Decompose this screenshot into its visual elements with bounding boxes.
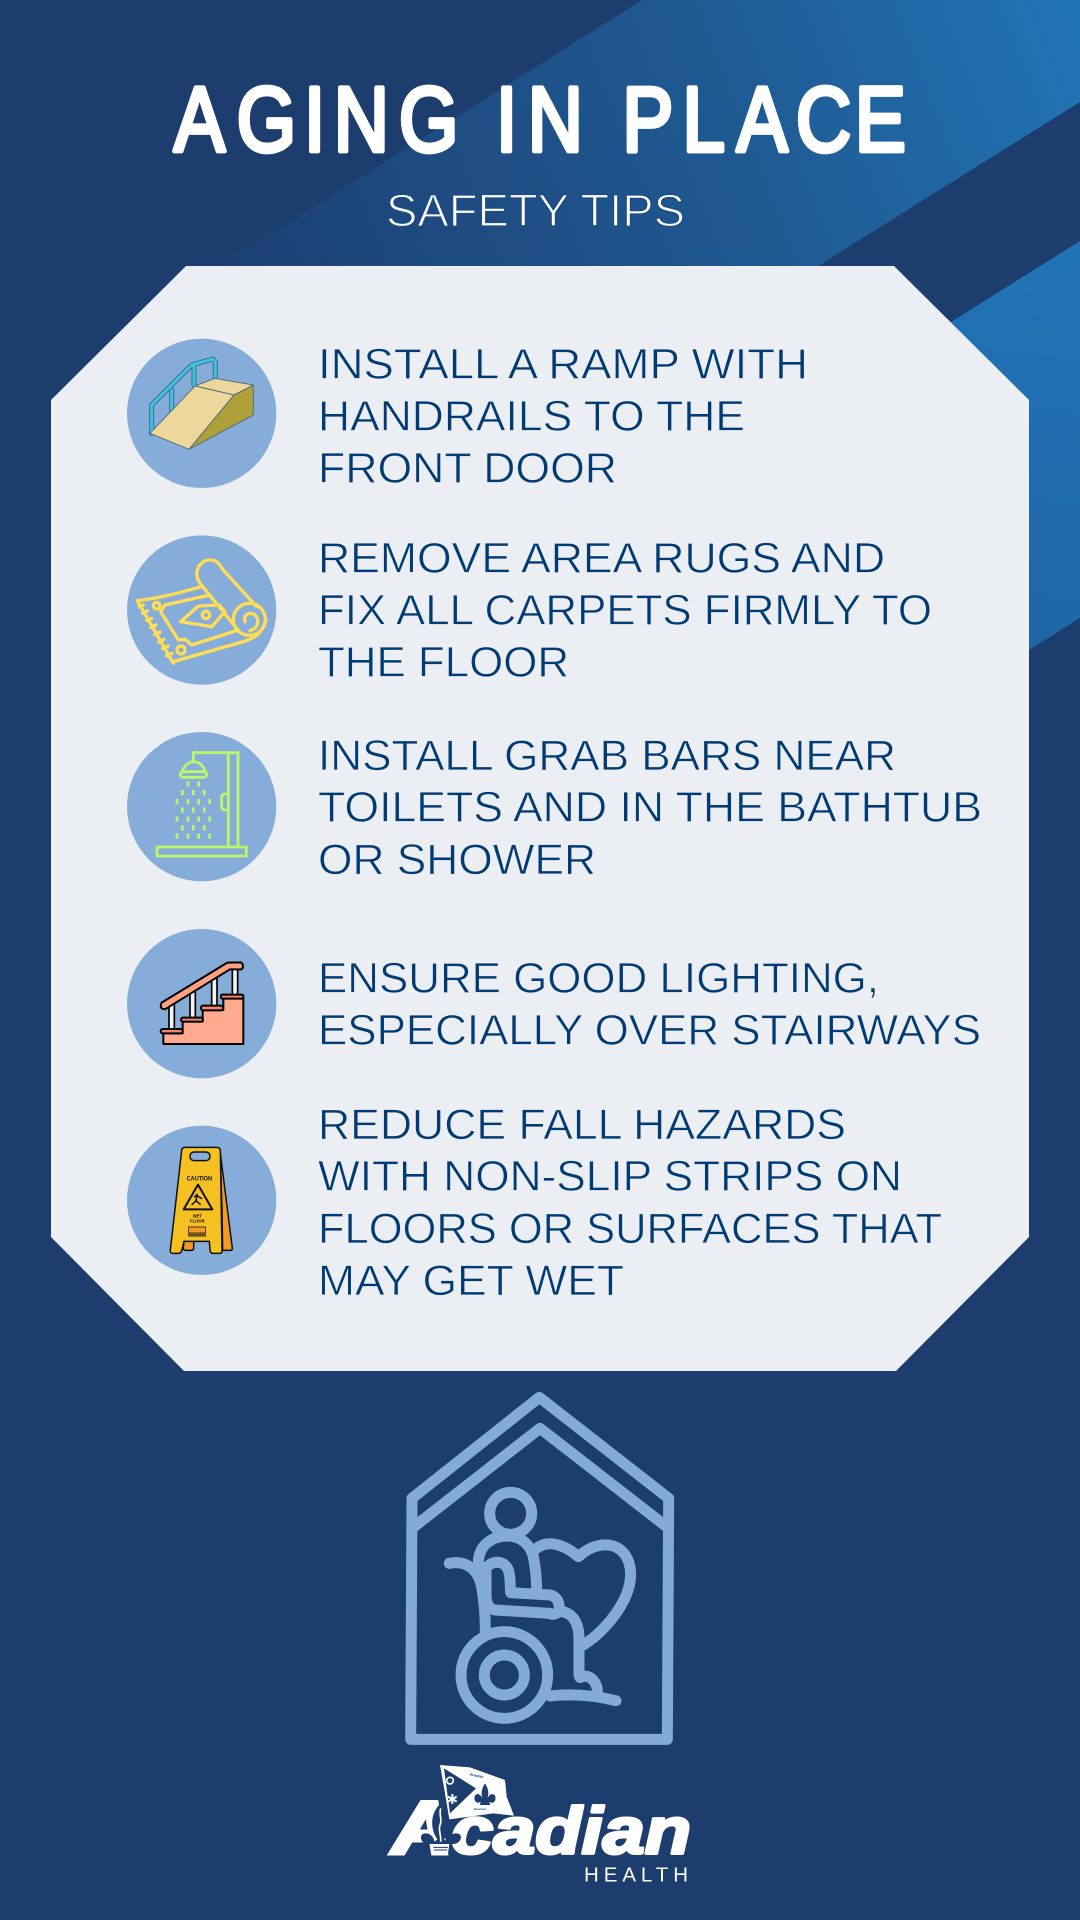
text: tip 1: HANDRAILS TO THE: [318, 394, 745, 441]
icon: ramp with handrails: [127, 339, 276, 488]
icon: wet floor sign: FLOOR: [190, 1219, 205, 1224]
panel: tips: [51, 266, 1029, 1371]
text: tip 2: THE FLOOR: [318, 640, 569, 687]
text: tip 5: WITH NON-SLIP STRIPS ON: [318, 1154, 902, 1201]
logo: Acadian Health: [391, 1765, 691, 1887]
text: tip 4: ESPECIALLY OVER STAIRWAYS: [318, 1008, 981, 1055]
text: tip 2: [318, 536, 932, 687]
title: AGING IN PLACE: [174, 67, 906, 171]
logo fleur-de-lis: [421, 1803, 461, 1853]
text: tip 5: MAY GET WET: [318, 1258, 624, 1305]
text: tip 5: REDUCE FALL HAZARDS: [318, 1102, 846, 1149]
logo flag: Services: [474, 1807, 487, 1811]
text: tip 3: OR SHOWER: [318, 837, 596, 884]
icon: stairs: [127, 929, 276, 1078]
icon: wet floor sign: [127, 1126, 276, 1275]
icon: shower: [127, 732, 276, 881]
text: tip 1: [318, 342, 808, 493]
text: tip 4: [318, 955, 981, 1055]
logo health label: HEALTH: [584, 1864, 688, 1887]
logo wordmark remainder: cadian: [451, 1793, 691, 1867]
logo wordmark initial: A: [391, 1788, 451, 1869]
text: tip 1: INSTALL A RAMP WITH: [318, 342, 808, 389]
icon: house with person in wheelchair and heart: [411, 1397, 669, 1739]
text: tip 2: REMOVE AREA RUGS AND: [318, 536, 885, 583]
logo flag: [440, 1765, 514, 1819]
subtitle: SAFETY TIPS: [386, 185, 685, 236]
text: tip 3: TOILETS AND IN THE BATHTUB: [318, 785, 982, 832]
text: tip 1: FRONT DOOR: [318, 446, 617, 493]
text: tip 3: INSTALL GRAB BARS NEAR: [318, 733, 896, 780]
icon: rolled rug: [127, 535, 276, 685]
icon: wet floor sign: CAUTION: [187, 1176, 212, 1183]
icon: wet floor sign: WET: [193, 1214, 202, 1219]
text: tip 5: FLOORS OR SURFACES THAT: [318, 1206, 942, 1253]
text: tip 2: FIX ALL CARPETS FIRMLY TO: [318, 588, 932, 635]
text: tip 5: [318, 1102, 942, 1305]
text: tip 4: ENSURE GOOD LIGHTING,: [318, 955, 879, 1002]
logo flag: Acadian: [468, 1772, 485, 1779]
text: tip 3: [318, 733, 982, 884]
